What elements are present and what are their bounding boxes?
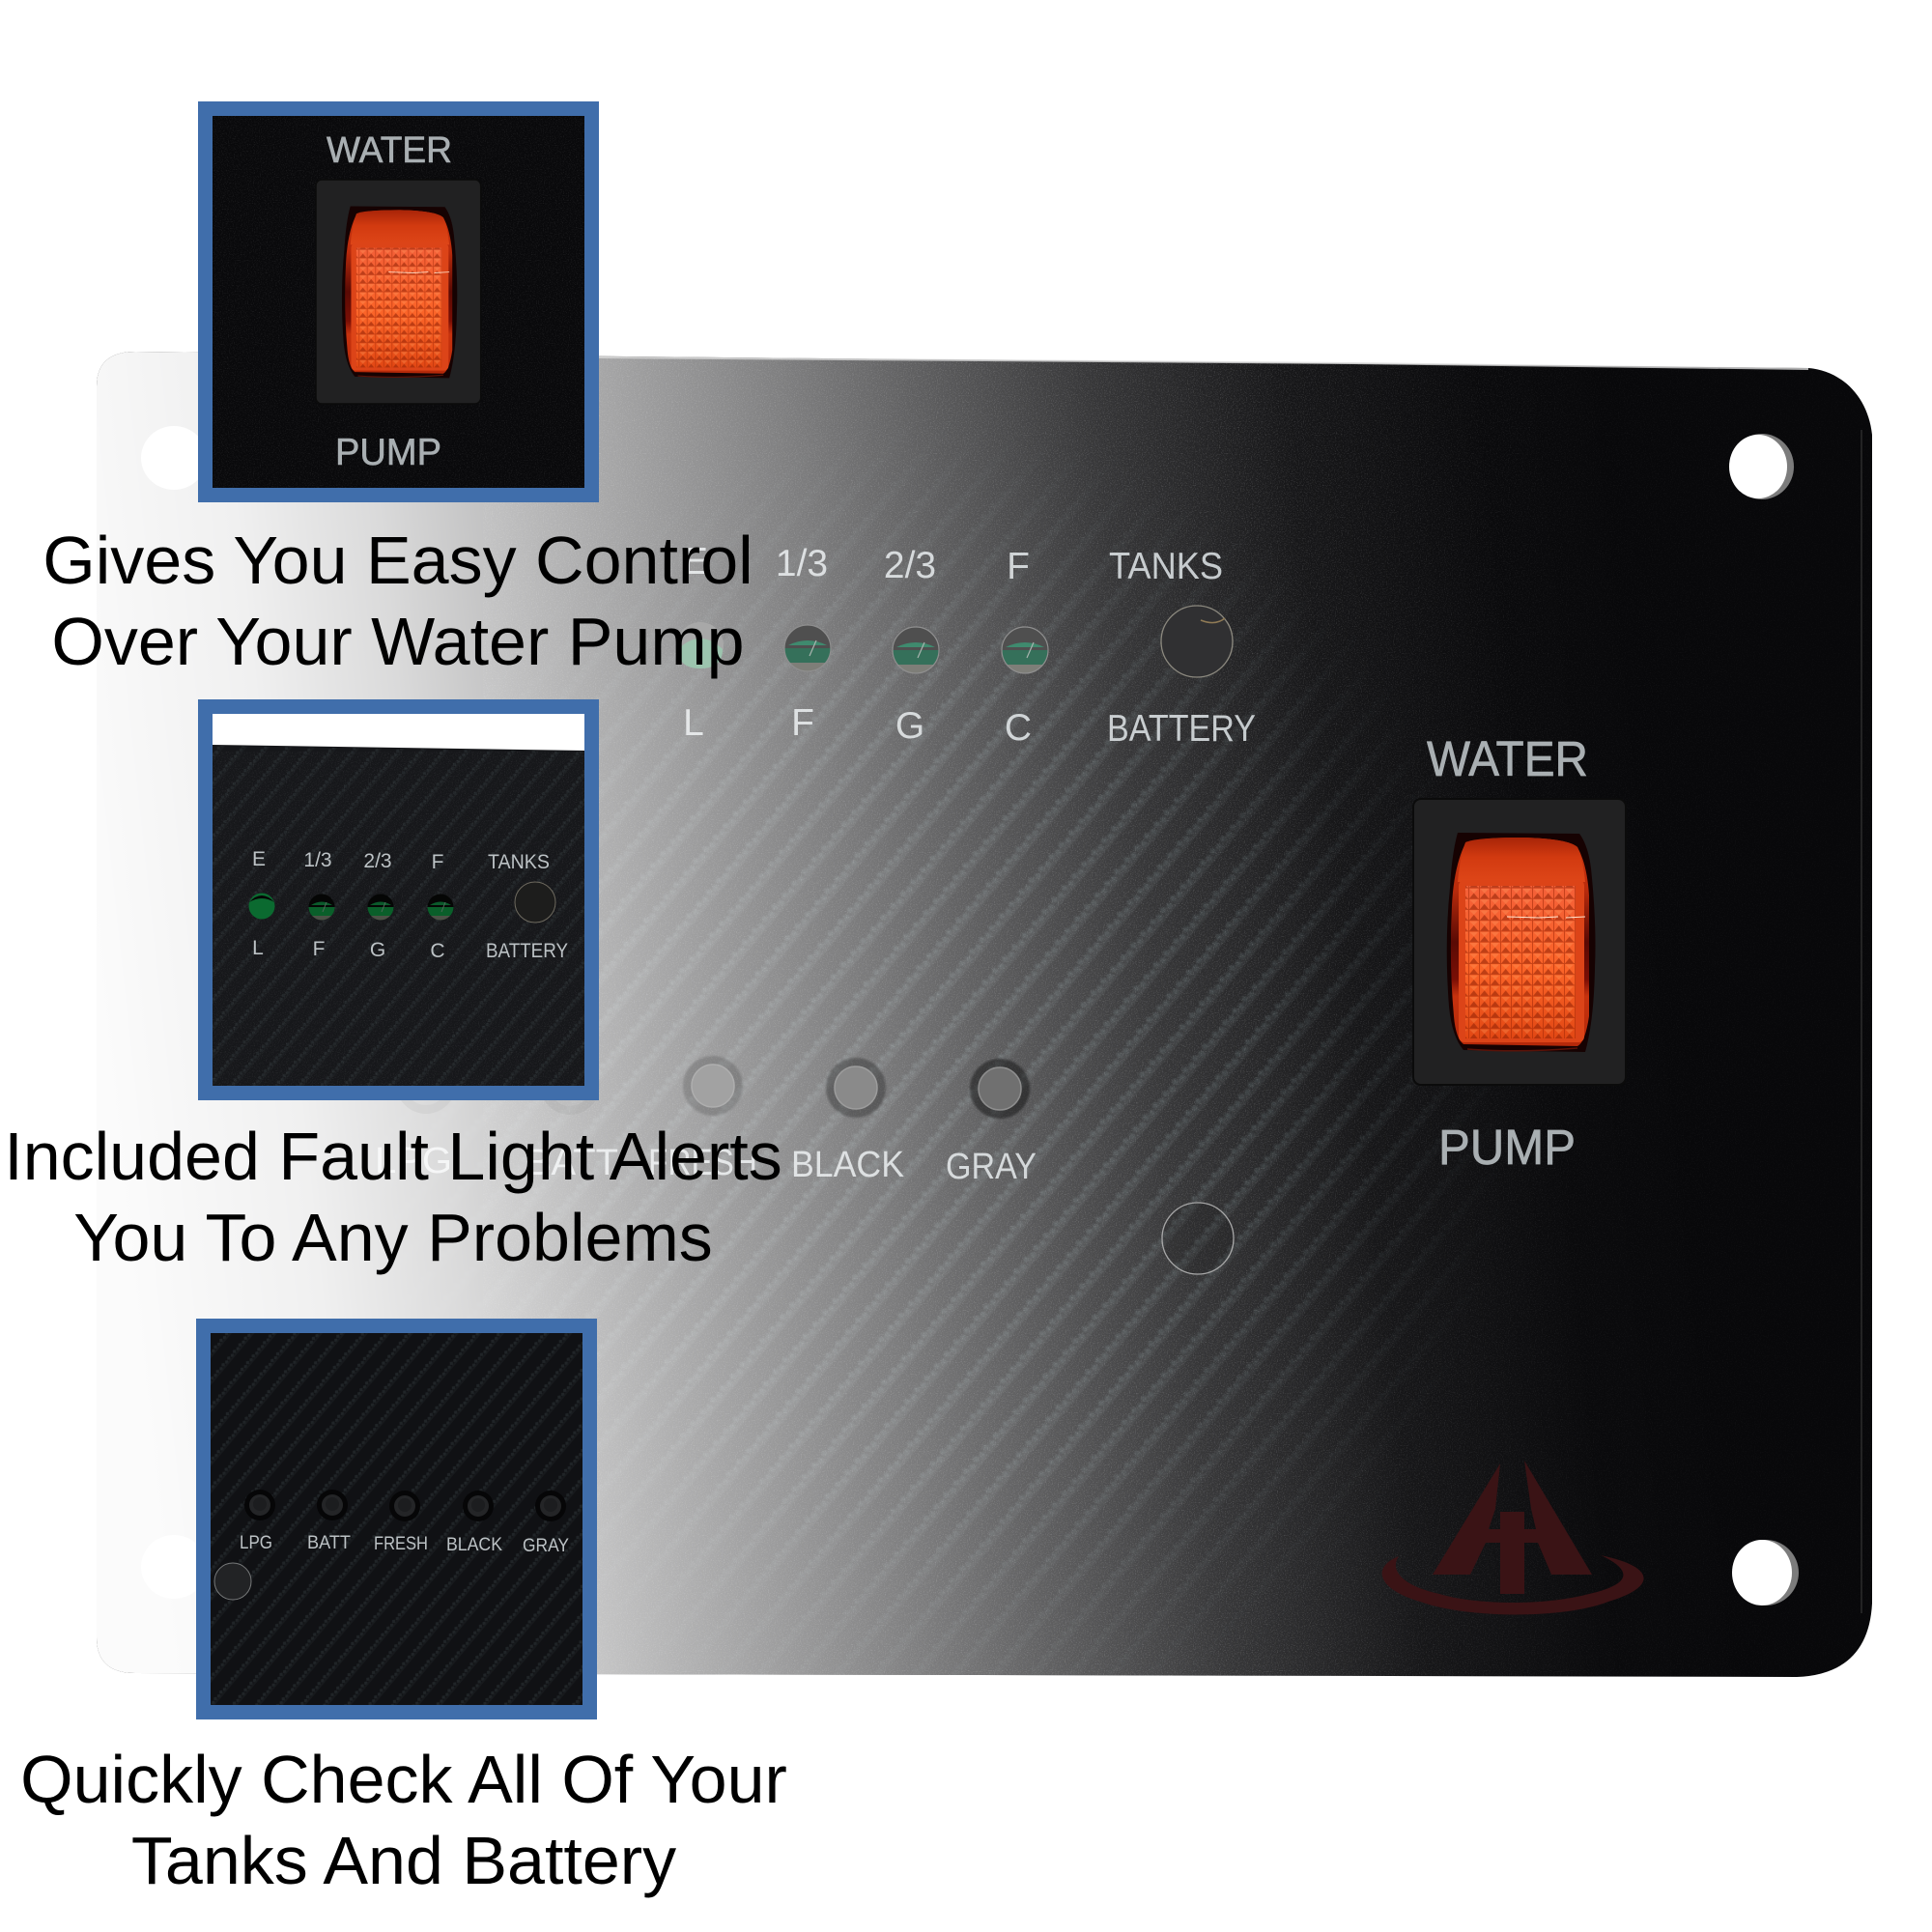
tank level LEDs on plate (677, 622, 1048, 673)
tank labels: 2/3 (363, 850, 392, 872)
tank labels: TANKS (488, 851, 550, 873)
tank labels: L (252, 937, 264, 959)
LED: GRAY (535, 1491, 566, 1521)
tank level labels, top row: E (683, 541, 708, 582)
heading: tanks and battery caption: Quickly Check All Of Your (20, 1742, 787, 1817)
fault labels: BLACK (446, 1535, 502, 1555)
tank level labels, top row: F (1007, 546, 1030, 587)
LED: BLACK (826, 1058, 886, 1118)
panel: faded carbon-fibre control plate (97, 352, 1872, 1677)
icon: blank circle lower (1162, 1203, 1234, 1274)
LED: BATT (317, 1490, 348, 1520)
LED: GRAY (970, 1059, 1030, 1119)
icon: lit rocker (316, 180, 481, 404)
LED: 1/3 (308, 894, 335, 921)
icon: lit orange rocker (1413, 799, 1626, 1085)
dark plate crop (211, 1333, 582, 1705)
fault light labels: BATT (526, 1143, 618, 1183)
carbon-fibre weave (595, 529, 1439, 1627)
surface grain (483, 358, 1718, 1677)
icon: mounting hole top right (1729, 434, 1794, 499)
heading: water pump caption: Gives You Easy Control (43, 523, 753, 598)
LED: LPG (396, 1054, 456, 1114)
battery level labels, second row: F (791, 702, 814, 744)
tank labels: BATTERY (486, 940, 568, 962)
grain (213, 752, 584, 1086)
panel: water pump close-up (198, 101, 599, 502)
carbon weave (211, 1333, 582, 1705)
icon: battery indicator circle (1161, 606, 1233, 677)
blue frame (198, 101, 599, 502)
LED: 1/3 level (784, 625, 831, 671)
LED: BLACK (463, 1491, 494, 1521)
tank labels: 1/3 (303, 849, 332, 871)
tank labels: E (252, 848, 266, 870)
blue frame (198, 699, 599, 1100)
tank labels: F (313, 938, 325, 960)
grain (213, 116, 584, 488)
carbon weave (213, 746, 584, 1086)
fault light labels: BLACK (791, 1145, 904, 1185)
logo: red HH road emblem (1382, 1461, 1644, 1615)
LED: first level green (249, 893, 274, 920)
blue frame (196, 1319, 597, 1719)
battery level labels, second row: L (683, 702, 704, 744)
battery level labels, second row: BATTERY (1107, 708, 1256, 750)
tank level labels, top row: 1/3 (776, 543, 828, 584)
label: PUMP: PUMP (335, 432, 441, 473)
battery level labels, second row (683, 702, 1256, 750)
tank labels (252, 848, 568, 962)
main rocker switch (1413, 731, 1626, 1175)
fault labels: BATT (307, 1533, 351, 1553)
tank labels: C (430, 940, 445, 962)
fault light labels (375, 1141, 1037, 1187)
LED: 2/3 (367, 894, 394, 921)
plate top edge highlight (599, 357, 1808, 369)
plate right edge line (1861, 430, 1862, 1613)
tank level labels, top row: 2/3 (884, 545, 936, 586)
LED: full (427, 894, 454, 921)
tank level labels, top row (683, 541, 1223, 587)
icon: mounting hole bottom right (1732, 1540, 1799, 1605)
icon: battery circle (515, 882, 555, 923)
heading: water pump caption: Over Your Water Pump (51, 604, 745, 679)
LED: 2/3 level (893, 627, 939, 673)
battery level labels, second row: C (1005, 707, 1032, 749)
label: WATER: WATER (327, 130, 452, 171)
fault labels: GRAY (523, 1536, 569, 1556)
icon: faded mounting hole top left (141, 426, 207, 490)
plate base (97, 352, 1872, 1677)
heading: fault light caption: Included Fault Light Alerts (4, 1119, 782, 1194)
LED: first level (677, 622, 724, 668)
LED: FRESH (683, 1056, 743, 1116)
white fade overlay (97, 352, 1872, 1677)
fault LEDs on plate (396, 1054, 1030, 1119)
LED: LPG (244, 1490, 275, 1520)
tank level labels, top row: TANKS (1109, 546, 1223, 587)
white strip above plate (213, 714, 584, 754)
fault light labels: LPG (375, 1141, 452, 1181)
LED: BATT (540, 1055, 600, 1115)
fault labels: FRESH (374, 1534, 428, 1554)
label: PUMP: PUMP (1438, 1120, 1576, 1175)
tank labels: G (370, 939, 385, 961)
tank labels: F (432, 851, 443, 873)
fault light labels: FRESH (648, 1143, 757, 1183)
panel: tank levels close-up (198, 699, 599, 1100)
LED: full level (1002, 627, 1048, 673)
icon: blank circle (214, 1563, 251, 1600)
battery level labels, second row: G (895, 705, 924, 747)
dark plate crop (213, 745, 584, 1086)
fault labels: LPG (240, 1533, 272, 1553)
icon: faded mounting hole bottom left (141, 1535, 207, 1599)
LED: FRESH (389, 1491, 420, 1521)
heading: fault light caption: You To Any Problems (73, 1200, 713, 1275)
label: WATER: WATER (1427, 731, 1588, 786)
fault light labels: GRAY (946, 1147, 1037, 1187)
heading: tanks and battery caption: Tanks And Battery (131, 1823, 676, 1898)
fault labels (240, 1533, 569, 1556)
dark plate crop (213, 116, 584, 488)
panel: tank and battery check close-up (196, 1319, 597, 1719)
